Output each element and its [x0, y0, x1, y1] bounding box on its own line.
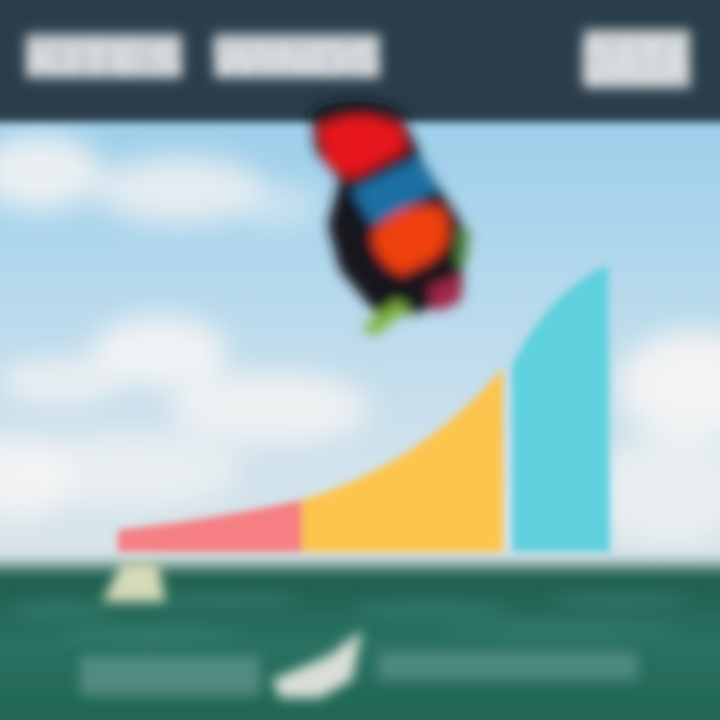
- icon: left marker: [102, 562, 166, 602]
- chart segment: yellow: [302, 368, 503, 552]
- chart segment: red: [118, 500, 302, 552]
- footer text right: [378, 652, 638, 680]
- heading text: KITES: [24, 34, 184, 86]
- heading text: [24, 30, 692, 95]
- icon: kite: [312, 101, 470, 336]
- clouds: [0, 134, 720, 545]
- footer text left: [80, 656, 260, 696]
- chart segment: cyan: [512, 265, 610, 552]
- area chart: [118, 265, 610, 552]
- header bar: [0, 0, 720, 122]
- sea: [0, 566, 720, 720]
- icon: white sail: [272, 630, 362, 698]
- footer shapes: [80, 562, 638, 698]
- heading text: WINDS: [212, 34, 382, 86]
- sea texture: [10, 594, 690, 641]
